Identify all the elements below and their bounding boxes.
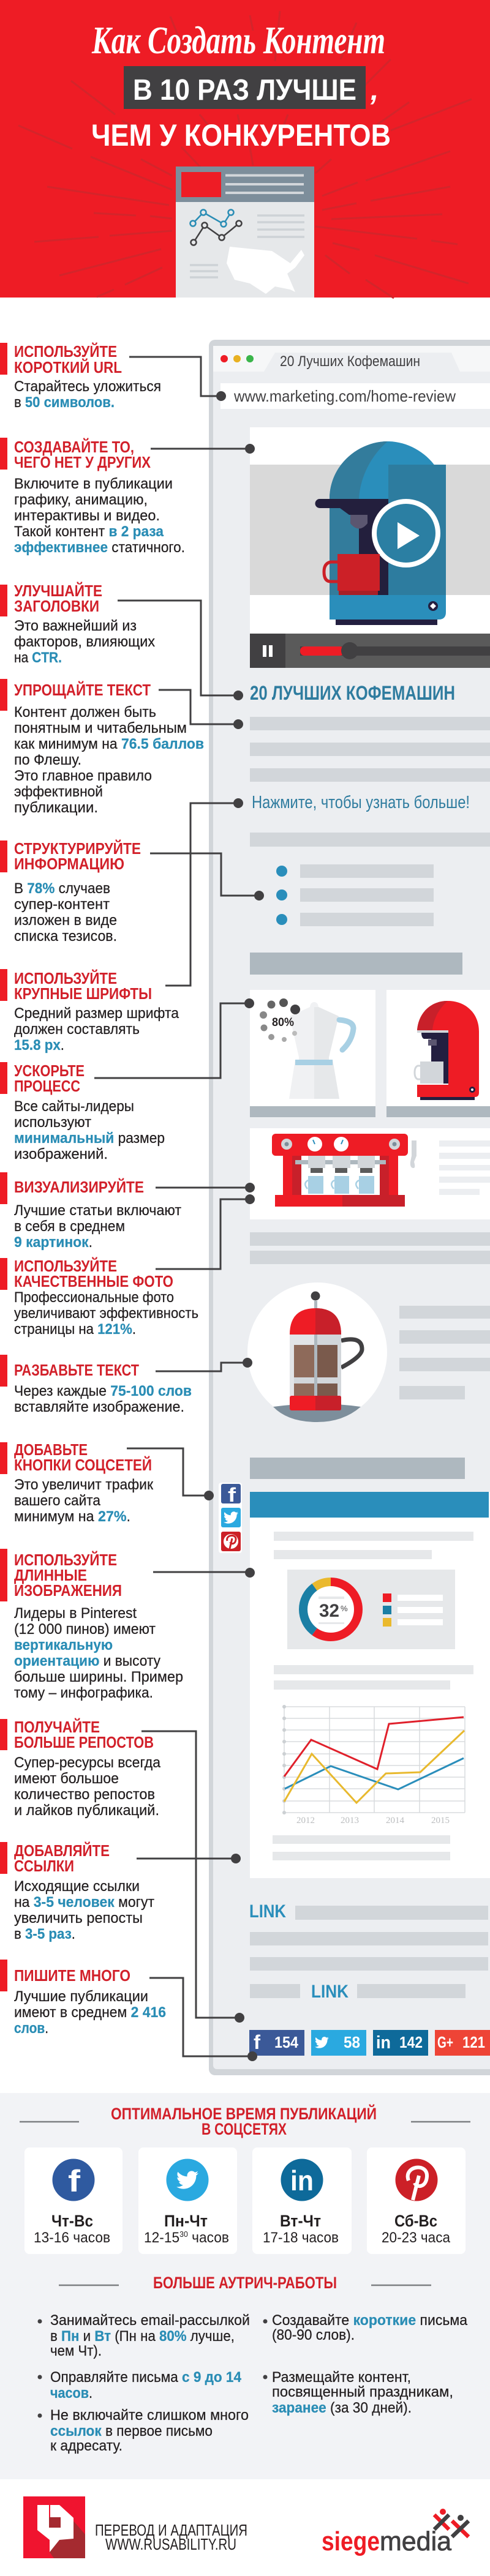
tip 12: long images: (12 000 пинов) имеют	[14, 1621, 156, 1638]
tip 10: break up text: РАЗБАВЬТЕ ТЕКСТ	[14, 1361, 139, 1379]
address bar	[221, 383, 490, 409]
connector lines	[94, 357, 264, 2061]
card: LinkedIn: 17-18 часов	[263, 2230, 339, 2246]
line chart: 2015	[431, 1816, 450, 1825]
tip 14: add links: на 3-5 человек могут	[14, 1894, 154, 1911]
image card: espresso machine	[250, 1128, 490, 1219]
title: highlighted box: В 10 РАЗ ЛУЧШЕ	[133, 74, 356, 107]
tip 6: large fonts: 15.8 px.	[14, 1037, 64, 1054]
tip 13: more shares: БОЛЬШЕ РЕПОСТОВ	[14, 1733, 154, 1751]
panel: browser mockup	[209, 340, 490, 2075]
outreach list: right column: Создавайте короткие письма	[272, 2312, 468, 2329]
outreach list: right column: заранее (за 30 дней).	[272, 2400, 412, 2416]
image card: moka pot: 80%	[272, 1016, 294, 1029]
tip 11: social buttons: минимум на 27%.	[14, 1508, 130, 1525]
tip 13: more shares: и лайков публикаций.	[14, 1802, 159, 1819]
share buttons: 121	[462, 2033, 485, 2051]
tip 5: structure information: супер-контент	[14, 896, 110, 913]
panel: bottom section	[0, 2093, 490, 2479]
card: LinkedIn: Вт-Чт	[280, 2212, 321, 2230]
tip 13: more shares: имеют большое	[14, 1770, 119, 1787]
outreach list: right column	[263, 2312, 468, 2416]
address bar: www.marketing.com/home-review	[233, 387, 456, 405]
tip 7: speed up: УСКОРЬТЕ	[14, 1061, 85, 1080]
tip 15: write a lot: имеют в среднем 2 416	[14, 2004, 166, 2021]
tip 1: short URL: в 50 символов.	[14, 394, 115, 411]
floating social buttons	[219, 1483, 242, 1553]
tip 13: more shares	[0, 1718, 161, 1819]
card: Pinterest: Сб-Вс	[394, 2212, 437, 2230]
tip 11: social buttons: Это увеличит трафик	[14, 1477, 153, 1493]
line chart: 2012	[296, 1816, 315, 1825]
tip 4: simplify text: УПРОЩАЙТЕ ТЕКСТ	[14, 681, 151, 699]
tip 3: headlines: факторов, влияющих	[14, 634, 155, 650]
tip 6: large fonts: должен составлять	[14, 1021, 140, 1038]
tip 8: visualize: в себя в среднем	[14, 1218, 125, 1235]
outreach list: left column: чем Чт).	[50, 2343, 102, 2359]
tip 10: break up text: вставляйте изображение.	[14, 1399, 184, 1415]
tip 1: short URL: КОРОТКИЙ URL	[14, 358, 122, 376]
heading: more outreach: БОЛЬШЕ АУТРИЧ-РАБОТЫ	[153, 2274, 337, 2292]
tip 14: add links	[0, 1841, 154, 1942]
outreach list: left column: часов.	[50, 2385, 92, 2402]
tip 1: short URL	[0, 342, 161, 411]
card: Pinterest	[367, 2147, 466, 2254]
outreach list: left column: в Пн и Вт (Пн на 80% лучше,	[50, 2328, 235, 2345]
donut chart card: %	[341, 1604, 348, 1613]
line chart: 2013	[341, 1816, 359, 1825]
subheading placeholder	[250, 953, 462, 975]
tip 2: unique content: Включите в публикации	[14, 476, 173, 492]
tip 5: structure information: В 78% случаев	[14, 880, 110, 897]
card: Twitter: часов	[188, 2230, 229, 2246]
tip 7: speed up: изображений.	[14, 1146, 108, 1163]
tip 14: add links: ССЫЛКИ	[14, 1857, 74, 1875]
image card: moka pot	[250, 990, 375, 1117]
footer: Siege Media logo: siege	[322, 2526, 380, 2556]
tip 7: speed up: используют	[14, 1114, 91, 1131]
subheading placeholder	[250, 1458, 465, 1479]
outreach list: left column: Оправляйте письма с 9 до 14	[50, 2369, 242, 2386]
tip 6: large fonts: ИСПОЛЬЗУЙТЕ	[14, 969, 117, 987]
image: french press	[247, 1282, 490, 1422]
browser tab: 20 Лучших Кофемашин	[280, 353, 420, 370]
tip 2: unique content: СОЗДАВАЙТЕ ТО,	[14, 438, 134, 456]
tip 8: visualize: ВИЗУАЛИЗИРУЙТЕ	[14, 1178, 144, 1196]
tip 12: long images: ДЛИННЫЕ	[14, 1566, 87, 1584]
share buttons: 142	[399, 2033, 423, 2051]
tip 4: simplify text: Это главное правило	[14, 768, 152, 784]
share buttons	[249, 2030, 490, 2056]
tip 8: visualize	[0, 1172, 181, 1251]
tip 4: simplify text: эффективной	[14, 784, 103, 800]
tip 9: quality photos: ИСПОЛЬЗУЙТЕ	[14, 1257, 117, 1275]
tip 9: quality photos: Профессиональные фото	[14, 1289, 174, 1306]
heading: best posting time: ОПТИМАЛЬНОЕ ВРЕМЯ ПУБЛИКАЦИЙ	[111, 2104, 377, 2123]
tip 4: simplify text	[0, 679, 204, 816]
heading: best posting time: В СОЦСЕТЯХ	[202, 2120, 287, 2138]
tip 7: speed up: Все сайты-лидеры	[14, 1098, 134, 1115]
outreach list: left column: ссылок в первое письмо	[50, 2423, 213, 2439]
tip 3: headlines: ЗАГОЛОВКИ	[14, 597, 99, 615]
tip 15: write a lot: слов.	[14, 2020, 48, 2037]
card: Pinterest: 20-23 часа	[382, 2230, 451, 2246]
video player with coffee machine	[250, 427, 490, 668]
tip 12: long images: Лидеры в Pinterest	[14, 1605, 137, 1622]
tip 2: unique content: эффективнее статичного.	[14, 539, 185, 556]
tip 8: visualize: Лучшие статьи включают	[14, 1202, 181, 1219]
tip 14: add links: ДОБАВЛЯЙТЕ	[14, 1841, 110, 1860]
outreach list: right column: Размещайте контент,	[272, 2369, 411, 2386]
footer: Siege Media logo	[322, 2509, 469, 2556]
tip 1: short URL: Старайтесь уложиться	[14, 378, 161, 395]
tip 9: quality photos	[0, 1257, 198, 1338]
tip 13: more shares: количество репостов	[14, 1786, 155, 1803]
browser window buttons	[221, 355, 254, 362]
tip 8: visualize: 9 картинок.	[14, 1234, 92, 1251]
tip 12: long images: ИСПОЛЬЗУЙТЕ	[14, 1551, 117, 1569]
tip 12: long images: вертикальную	[14, 1637, 113, 1653]
tip 4: simplify text: как минимум на 76.5 баллов	[14, 736, 204, 752]
tip 3: headlines: на CTR.	[14, 650, 62, 666]
card: Facebook: Чт-Вс	[51, 2212, 93, 2230]
tip 7: speed up	[0, 1061, 165, 1163]
tip 12: long images	[0, 1549, 183, 1701]
tip 2: unique content: интерактивы и видео.	[14, 507, 160, 524]
tip 15: write a lot: Лучшие публикации	[14, 1988, 148, 2005]
card: LinkedIn: in	[290, 2165, 314, 2196]
tip 7: speed up: минимальный размер	[14, 1130, 165, 1147]
title: script line: Как Создать Контент	[91, 18, 385, 62]
tip 4: simplify text: публикации.	[14, 799, 98, 816]
share buttons: G+	[437, 2033, 453, 2051]
tip 5: structure information: списка тезисов.	[14, 928, 117, 945]
tip 15: write a lot	[0, 1960, 166, 2037]
share buttons: 58	[344, 2033, 360, 2051]
tip 3: headlines	[0, 582, 155, 666]
card: LinkedIn	[252, 2147, 352, 2254]
links section: LINK	[249, 1901, 286, 1922]
content panel with charts	[250, 1492, 490, 1878]
tip 6: large fonts: КРУПНЫЕ ШРИФТЫ	[14, 984, 152, 1003]
tip 1: short URL: ИСПОЛЬЗУЙТЕ	[14, 342, 117, 361]
card: Facebook	[24, 2147, 123, 2254]
tip 14: add links: Исходящие ссылки	[14, 1878, 140, 1895]
tip 14: add links: в 3-5 раз.	[14, 1926, 75, 1942]
donut chart card: 32	[319, 1601, 339, 1621]
tip 4: simplify text: Контент должен быть	[14, 704, 156, 721]
bulleted list placeholder	[250, 833, 490, 926]
tip 2: unique content	[0, 438, 185, 556]
tip 12: long images: тому – инфографика.	[14, 1685, 153, 1701]
outreach list: right column: посвященный праздникам,	[272, 2384, 453, 2400]
image card: red coffee machine	[386, 990, 490, 1117]
heading: best posting time	[20, 2104, 470, 2138]
line chart	[282, 1705, 465, 1825]
card: Twitter: Пн-Чт	[164, 2212, 208, 2230]
links section: LINK	[311, 1982, 349, 2002]
tip 3: headlines: Это важнейший из	[14, 618, 137, 634]
outreach list: left column: Занимайтесь email-рассылкой	[50, 2312, 250, 2329]
tip 12: long images: ИЗОБРАЖЕНИЯ	[14, 1581, 122, 1600]
tip 9: quality photos: страницы на 121%.	[14, 1321, 136, 1338]
tip 5: structure information: ИНФОРМАЦИЮ	[14, 855, 124, 873]
card: Facebook: f	[68, 2164, 80, 2198]
tip 5: structure information	[0, 839, 141, 945]
tip 6: large fonts: Средний размер шрифта	[14, 1005, 179, 1022]
header banner	[0, 0, 490, 298]
tip 14: add links: увеличить репосты	[14, 1910, 143, 1926]
outreach list: left column	[38, 2312, 250, 2454]
links section	[249, 1901, 488, 2002]
tip 6: large fonts	[0, 969, 179, 1054]
outreach list: left column: Не включайте слишком много	[50, 2407, 249, 2424]
share buttons: in	[376, 2033, 391, 2053]
tip 13: more shares: ПОЛУЧАЙТЕ	[14, 1718, 100, 1736]
tip 5: structure information: СТРУКТУРИРУЙТЕ	[14, 839, 141, 858]
text placeholder lines	[250, 1232, 490, 1264]
card: Facebook: 13-16 часов	[34, 2230, 110, 2246]
tip 7: speed up: ПРОЦЕСС	[14, 1077, 80, 1095]
tip 4: simplify text: понятным и читабельным	[14, 720, 187, 736]
tip 2: unique content: Такой контент в 2 раза	[14, 523, 164, 540]
card: Twitter	[138, 2147, 237, 2254]
footer: Rusability logo	[23, 2496, 247, 2558]
outreach list: left column: к адресату.	[50, 2438, 123, 2454]
card: Twitter: 12-15	[144, 2230, 181, 2246]
card: Twitter: 30	[179, 2230, 188, 2239]
tip 9: quality photos: КАЧЕСТВЕННЫЕ ФОТО	[14, 1272, 173, 1290]
tip 15: write a lot: ПИШИТЕ МНОГО	[14, 1966, 130, 1985]
illustration: document with charts and map	[176, 167, 314, 298]
tip 11: social buttons: КНОПКИ СОЦСЕТЕЙ	[14, 1456, 152, 1474]
tip 3: headlines: УЛУЧШАЙТЕ	[14, 582, 102, 600]
footer: Rusability logo: ПЕРЕВОД И АДАПТАЦИЯ	[95, 2521, 247, 2539]
tip 11: social buttons	[0, 1440, 153, 1525]
tip 4: simplify text: по Флешу.	[14, 752, 81, 768]
tip 5: structure information: изложен в виде	[14, 912, 117, 929]
tip 11: social buttons: ДОБАВЬТЕ	[14, 1440, 88, 1459]
tips column	[0, 342, 204, 2037]
footer: Rusability logo: WWW.RUSABILITY.RU	[105, 2535, 236, 2553]
title: comma: ,	[370, 74, 379, 107]
share buttons: 154	[274, 2033, 298, 2051]
tip 13: more shares: Супер-ресурсы всегда	[14, 1754, 161, 1771]
tip 2: unique content: графику, анимацию,	[14, 492, 148, 508]
footer: Siege Media logo: media	[380, 2526, 452, 2556]
tip 2: unique content: ЧЕГО НЕТ У ДРУГИХ	[14, 453, 151, 471]
tip 11: social buttons: вашего сайта	[14, 1492, 101, 1509]
tip 12: long images: больше ширины. Пример	[14, 1669, 183, 1685]
donut chart card	[287, 1570, 455, 1649]
tip 10: break up text	[0, 1355, 192, 1415]
floating social buttons: f	[228, 1484, 236, 1506]
outreach list: right column: (80-90 слов).	[272, 2327, 355, 2343]
text placeholder lines	[250, 717, 490, 782]
tip 10: break up text: Через каждые 75-100 слов	[14, 1383, 192, 1399]
share buttons: f	[254, 2031, 260, 2053]
tip 12: long images: ориентацию и высоту	[14, 1653, 160, 1669]
tip 9: quality photos: увеличивают эффективность	[14, 1305, 198, 1322]
title: bottom line: ЧЕМ У КОНКУРЕНТОВ	[91, 118, 391, 152]
line chart: 2014	[386, 1816, 404, 1825]
